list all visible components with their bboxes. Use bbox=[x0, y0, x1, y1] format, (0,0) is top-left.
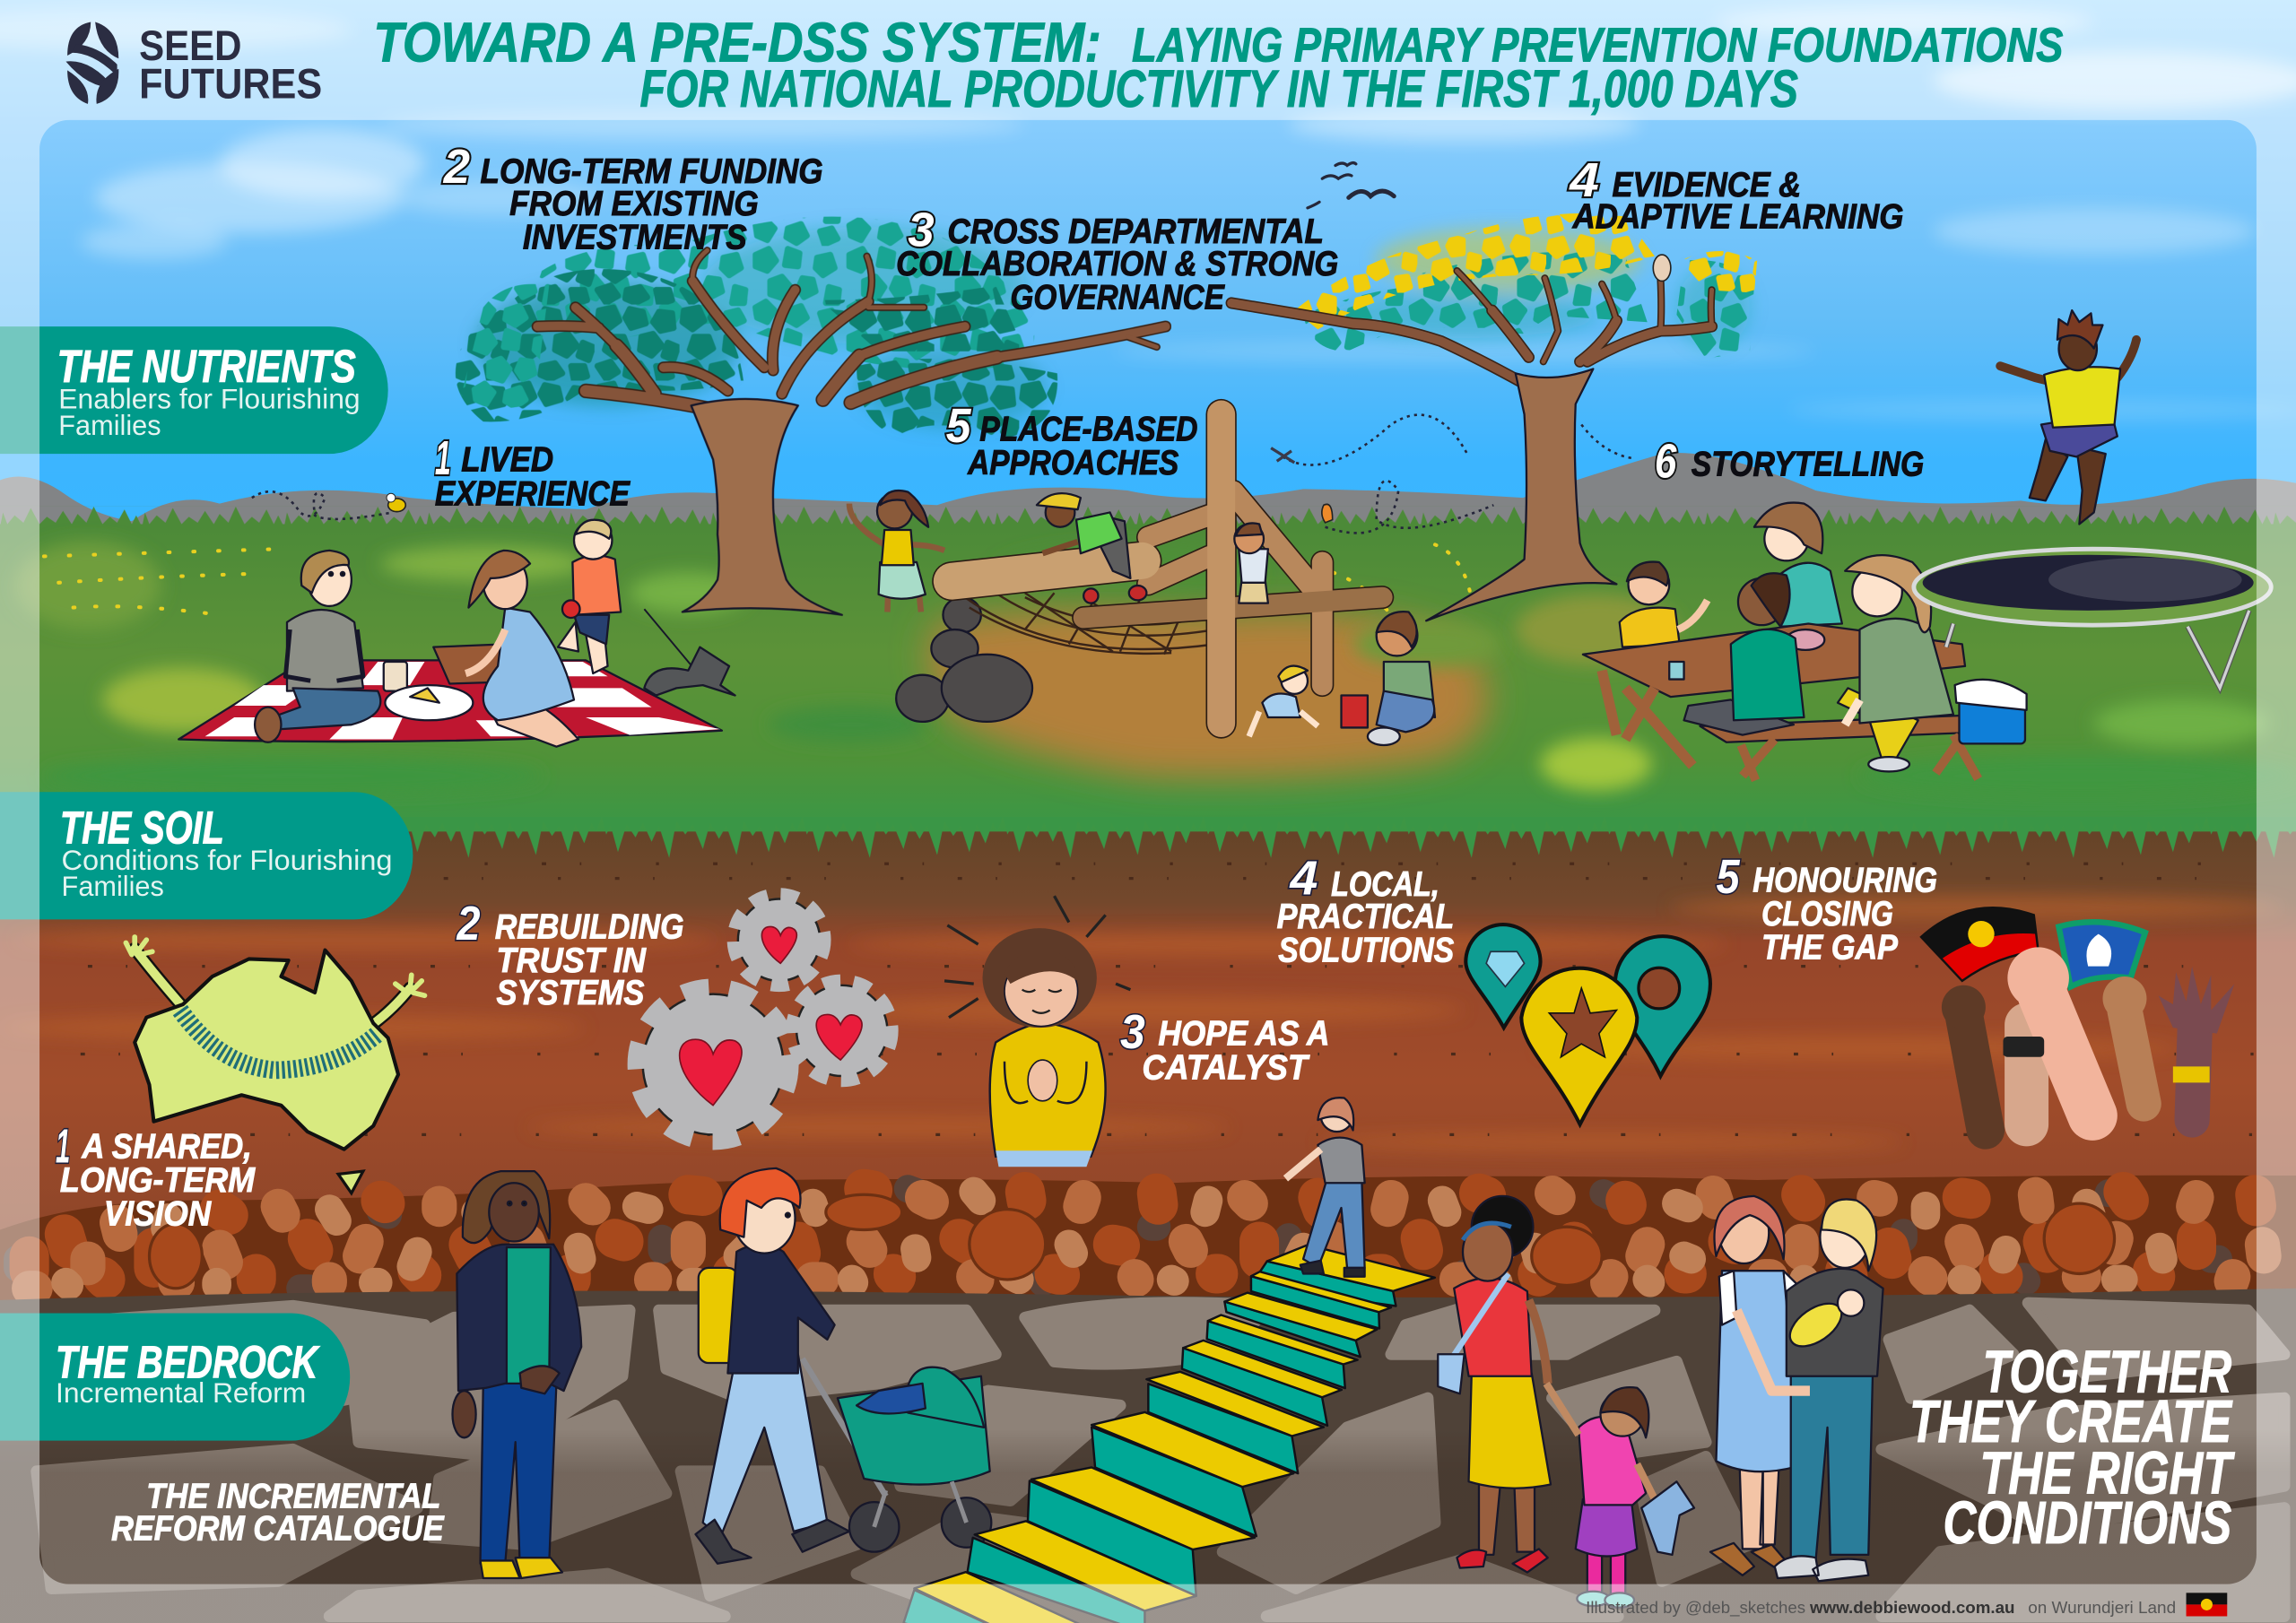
torres strait flag bbox=[2059, 922, 2145, 986]
label: cross departmental: COLLABORATION & STRONG bbox=[896, 245, 1338, 283]
dark pebbles bbox=[18, 1189, 2218, 1291]
label: rebuilding trust: 2 bbox=[457, 897, 481, 950]
label: incremental reform catalogue: THE INCREMENTAL bbox=[146, 1478, 440, 1516]
icon: gears and hearts bbox=[637, 895, 891, 1141]
label: incremental reform catalogue bbox=[111, 1478, 445, 1549]
tab: the soil bbox=[0, 792, 413, 919]
bench bbox=[1700, 715, 1990, 742]
label: lived experience: EXPERIENCE bbox=[435, 474, 631, 513]
label: evidence and adaptive learning: 4 bbox=[1569, 153, 1599, 207]
title bbox=[373, 13, 2063, 118]
woman with hoodie bbox=[452, 1171, 581, 1578]
tab text: the nutrients: THE NUTRIENTS bbox=[57, 341, 356, 392]
table top bbox=[1583, 624, 1965, 697]
tree: right bbox=[1231, 213, 1757, 621]
label: honouring closing the gap: HONOURING bbox=[1752, 861, 1937, 899]
trampoline bbox=[1914, 549, 2271, 688]
label: long-term funding: 2 bbox=[443, 140, 470, 194]
label: shared long-term vision bbox=[56, 1119, 256, 1234]
bedrock layer bbox=[0, 1289, 2296, 1623]
toddler crawling bbox=[1249, 666, 1318, 736]
label: honouring closing the gap bbox=[1716, 850, 1937, 967]
illustrator credit bbox=[1586, 1598, 2176, 1618]
label: local practical solutions: 4 bbox=[1289, 852, 1318, 906]
soil streaks bbox=[0, 896, 2284, 1150]
label: storytelling bbox=[1655, 434, 1924, 488]
icon: australia map bbox=[126, 937, 424, 1193]
label: local practical solutions: SOLUTIONS bbox=[1278, 932, 1454, 970]
icon: woman with hope bbox=[944, 896, 1130, 1167]
clouds bbox=[0, 7, 2296, 421]
dirt patch bbox=[929, 611, 1489, 777]
label: incremental reform catalogue: REFORM CATALOGUE bbox=[111, 1510, 445, 1549]
jeans bbox=[703, 1354, 827, 1537]
label: storytelling: 6 bbox=[1655, 434, 1677, 488]
label: cross departmental bbox=[896, 203, 1338, 317]
dark orange stones bbox=[30, 1189, 2257, 1280]
couple with baby bbox=[1710, 1196, 1883, 1581]
child in frame bbox=[1234, 523, 1268, 603]
pregnant woman bbox=[465, 551, 578, 747]
closing statement bbox=[1909, 1339, 2235, 1557]
tab text: the nutrients bbox=[57, 341, 361, 441]
label: storytelling: STORYTELLING bbox=[1692, 446, 1924, 484]
label: evidence and adaptive learning: EVIDENCE & bbox=[1613, 166, 1801, 204]
title: FOR NATIONAL PRODUCTIVITY IN THE FIRST 1,000 DAYS bbox=[639, 60, 1798, 118]
person at top of stairs bbox=[1285, 1098, 1365, 1277]
girl waving bbox=[849, 490, 944, 612]
left tree canopy haze bbox=[476, 227, 1047, 429]
stair risers bbox=[904, 1262, 1396, 1623]
stair treads bbox=[914, 1245, 1435, 1623]
teal pin with diamond bbox=[1465, 924, 1541, 1028]
bee flight paths bbox=[252, 415, 1632, 533]
staircase bbox=[904, 1245, 1435, 1623]
tab: the nutrients bbox=[0, 326, 388, 454]
tree: left bbox=[456, 217, 1166, 615]
label: rebuilding trust bbox=[457, 897, 683, 1012]
closing statement: THE RIGHT bbox=[1979, 1439, 2235, 1506]
mountains bbox=[0, 453, 2296, 556]
right tree canopy haze bbox=[1333, 229, 1750, 349]
tab text: the soil bbox=[60, 802, 393, 902]
label: long-term funding: FROM EXISTING bbox=[509, 185, 759, 223]
label: cross departmental: GOVERNANCE bbox=[1011, 278, 1225, 317]
light stones bbox=[65, 1192, 2162, 1286]
label: place-based approaches: 5 bbox=[946, 399, 971, 453]
sky bbox=[0, 0, 2296, 542]
picnic table group bbox=[1583, 503, 2027, 780]
right gear bbox=[792, 981, 891, 1081]
logo wordmark: SEED bbox=[139, 22, 241, 70]
label: place-based approaches bbox=[946, 399, 1198, 482]
label: long-term funding: LONG-TERM FUNDING bbox=[481, 152, 823, 191]
large gear bbox=[637, 988, 789, 1141]
stone layer bbox=[0, 1176, 2296, 1303]
right tree leaves bbox=[1294, 213, 1757, 359]
left tree trunk bbox=[683, 399, 842, 615]
mid stones bbox=[30, 1193, 2264, 1289]
soil layer bbox=[0, 831, 2296, 1249]
label: rebuilding trust: SYSTEMS bbox=[496, 974, 644, 1012]
label: cross departmental: 3 bbox=[908, 203, 935, 256]
bee bbox=[387, 493, 405, 512]
mother and daughter bbox=[1438, 1196, 1694, 1608]
label: shared long-term vision: A SHARED, bbox=[82, 1127, 252, 1166]
label: local practical solutions: PRACTICAL bbox=[1277, 898, 1454, 936]
label: honouring closing the gap: 5 bbox=[1716, 850, 1740, 904]
cooler bbox=[1955, 680, 2027, 743]
man with pram bbox=[696, 1168, 991, 1564]
owl bbox=[1653, 255, 1671, 281]
label: hope as a catalyst bbox=[1120, 1005, 1329, 1087]
tab text: the nutrients: Enablers for Flourishing bbox=[58, 383, 361, 415]
label: lived experience: 1 bbox=[435, 431, 451, 485]
tab text: the soil: Families bbox=[62, 870, 164, 902]
label: lived experience bbox=[435, 431, 631, 513]
title: LAYING PRIMARY PREVENTION FOUNDATIONS bbox=[1132, 19, 2063, 73]
tab: the bedrock bbox=[0, 1314, 350, 1441]
tab text: the bedrock: THE BEDROCK bbox=[56, 1336, 320, 1387]
logo mark bbox=[65, 22, 118, 104]
playground rocks bbox=[896, 597, 1032, 722]
label: hope as a catalyst: CATALYST bbox=[1142, 1048, 1310, 1087]
label: honouring closing the gap: THE GAP bbox=[1761, 928, 1899, 967]
child in green bbox=[1684, 573, 1804, 735]
man on blanket bbox=[255, 551, 380, 742]
grass field bbox=[0, 507, 2296, 849]
label: local practical solutions bbox=[1277, 852, 1454, 970]
logo bbox=[65, 22, 322, 108]
tab text: the soil: THE SOIL bbox=[60, 802, 224, 853]
label: shared long-term vision: VISION bbox=[104, 1195, 212, 1234]
right tree trunk bbox=[1426, 369, 1616, 621]
label: place-based approaches: PLACE-BASED bbox=[979, 410, 1198, 448]
child in yellow bbox=[1620, 562, 1708, 647]
tab text: the soil: Conditions for Flourishing bbox=[62, 844, 393, 876]
label: lived experience: LIVED bbox=[461, 441, 553, 480]
child climbing on log bbox=[1037, 493, 1146, 603]
label: place-based approaches: APPROACHES bbox=[967, 444, 1178, 482]
right tree branches bbox=[1231, 271, 1712, 382]
people chain bbox=[180, 1011, 378, 1070]
yellow backpack bbox=[699, 1268, 738, 1363]
label: shared long-term vision: 1 bbox=[56, 1119, 70, 1173]
child in teal bbox=[1754, 503, 1842, 627]
yellow pin with star bbox=[1521, 968, 1637, 1124]
label: cross departmental: CROSS DEPARTMENTAL bbox=[947, 213, 1324, 251]
icon: aboriginal flag bbox=[2187, 1593, 2227, 1616]
tab text: the bedrock: Incremental Reform bbox=[56, 1376, 306, 1409]
boy sitting with bucket bbox=[1342, 612, 1435, 745]
grass root edge bbox=[0, 817, 2296, 861]
label: long-term funding bbox=[443, 140, 823, 257]
label: evidence and adaptive learning: ADAPTIVE LEARNING bbox=[1572, 198, 1903, 237]
picnic basket and food bbox=[384, 644, 505, 720]
icon: map pins bbox=[1465, 924, 1710, 1124]
playground timber frame bbox=[952, 414, 1382, 724]
label: hope as a catalyst: 3 bbox=[1120, 1005, 1145, 1059]
soil specks bbox=[44, 864, 2255, 1134]
label: rebuilding trust: TRUST IN bbox=[496, 942, 647, 980]
illustrator credit: www.debbiewood.com.au bbox=[1809, 1598, 2015, 1617]
left tree leaves bbox=[456, 217, 1057, 439]
label: shared long-term vision: LONG-TERM bbox=[60, 1161, 256, 1200]
flowers bbox=[44, 544, 1472, 615]
label: local practical solutions: LOCAL, bbox=[1331, 865, 1439, 904]
child jumping bbox=[2000, 310, 2136, 525]
left tree branches bbox=[537, 250, 1166, 409]
tab text: the bedrock bbox=[56, 1336, 320, 1409]
icon: raised hands and flags bbox=[1921, 907, 2234, 1130]
label: evidence and adaptive learning bbox=[1569, 153, 1903, 237]
birds bbox=[1308, 163, 1394, 208]
label: honouring closing the gap: CLOSING bbox=[1761, 895, 1893, 933]
tab text: the nutrients: Families bbox=[58, 409, 161, 441]
daughter bbox=[1546, 1384, 1694, 1608]
dragonfly and butterfly bbox=[1271, 448, 1333, 523]
pram bbox=[803, 1358, 991, 1552]
label: hope as a catalyst: HOPE AS A bbox=[1158, 1015, 1329, 1054]
small gear bbox=[734, 895, 824, 985]
rope net bbox=[959, 593, 1215, 655]
logo: FUTURES bbox=[139, 60, 322, 108]
label: long-term funding: INVESTMENTS bbox=[523, 219, 747, 257]
woman in green bbox=[1838, 555, 1953, 771]
illustrator credit: Illustrated by @deb_sketches bbox=[1586, 1598, 1805, 1618]
picnic blanket bbox=[178, 660, 722, 742]
boy running with dog bbox=[558, 520, 735, 696]
teal pin with ring bbox=[1615, 936, 1710, 1076]
label: rebuilding trust: REBUILDING bbox=[495, 908, 683, 947]
aboriginal flag bbox=[1921, 907, 2039, 981]
title: TOWARD A PRE-DSS SYSTEM: bbox=[373, 13, 1101, 74]
illustrator credit: on Wurundjeri Land bbox=[2028, 1598, 2176, 1617]
grass patches bbox=[14, 542, 2296, 796]
